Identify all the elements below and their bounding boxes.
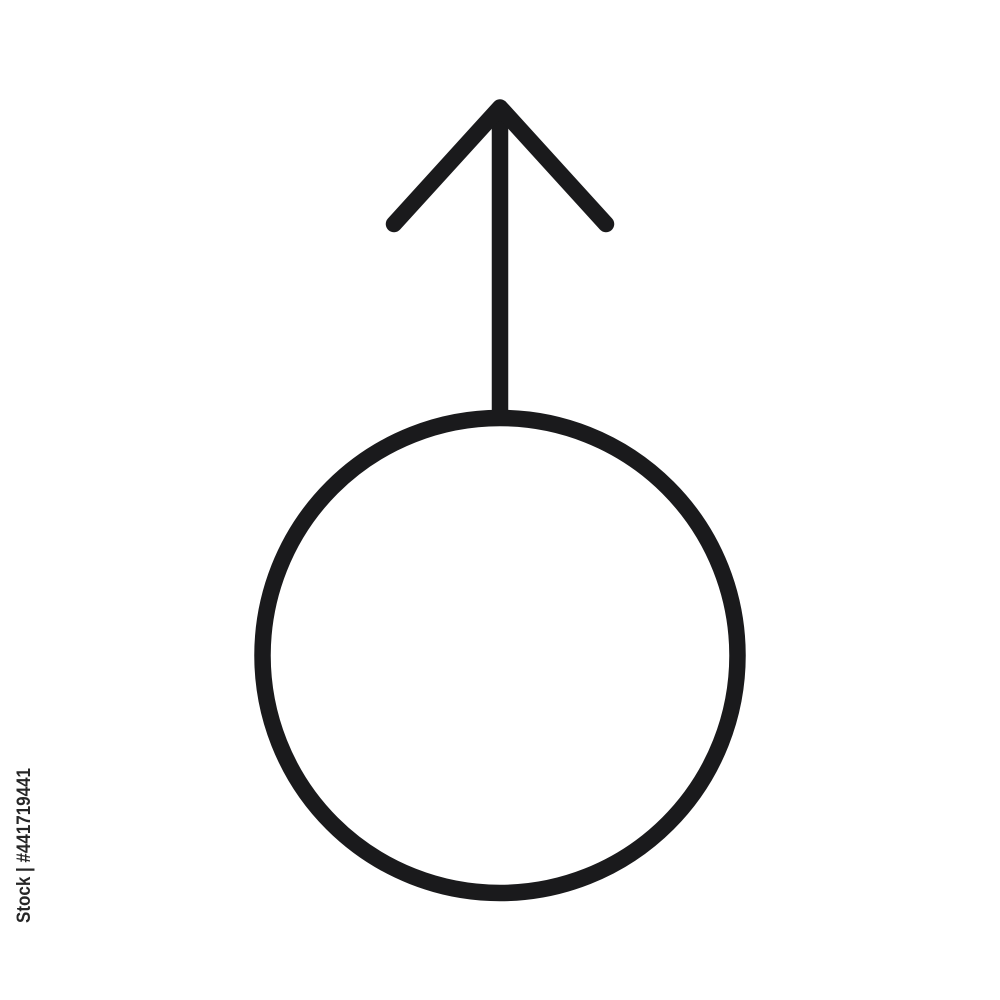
circle bbox=[262, 418, 738, 893]
icon group bbox=[262, 108, 738, 893]
arrow stem bbox=[492, 108, 508, 418]
arrow head bbox=[394, 108, 606, 224]
stock id text: Stock | #441719441 bbox=[14, 768, 35, 923]
